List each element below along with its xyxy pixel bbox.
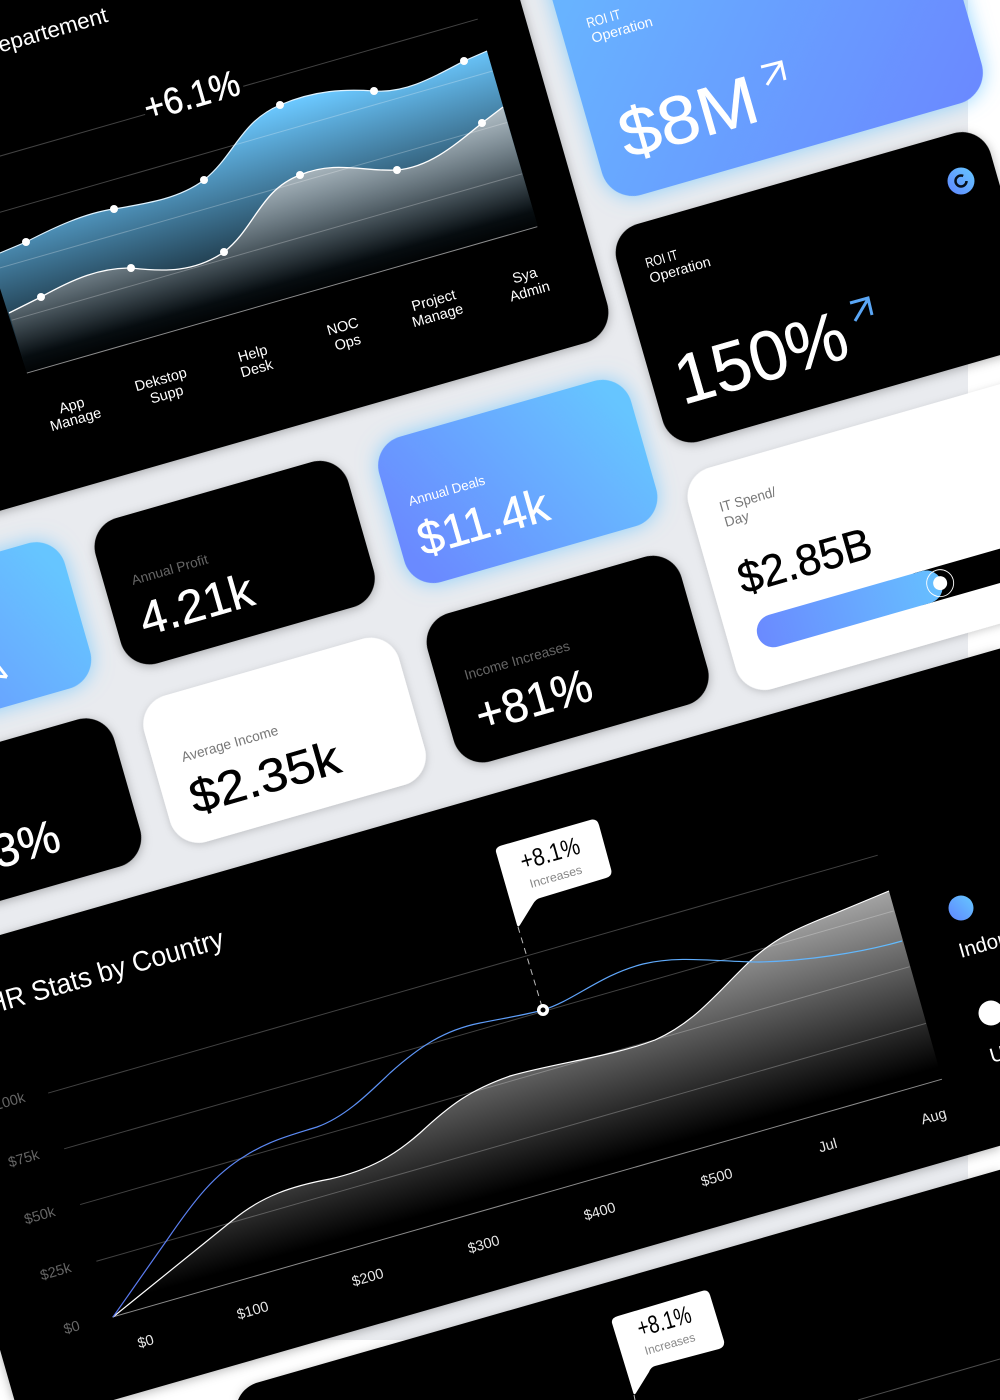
x axis labels: Desk <box>239 357 276 381</box>
x axis labels: Project <box>410 287 458 315</box>
card: left black stat <box>0 711 148 930</box>
x axis labels: Dekstop <box>133 365 189 395</box>
data points <box>22 57 486 301</box>
x axis labels: $300 <box>466 1233 502 1257</box>
callout: +8.1% increases: Increases <box>643 1330 697 1358</box>
card: Income Increases <box>420 549 716 769</box>
chart: blue area series <box>0 51 538 373</box>
icon: white arrow <box>761 62 785 85</box>
x axis labels: Admin <box>508 279 552 306</box>
card: ROI IT Operation 150%: Operation <box>647 253 712 286</box>
card: ROI IT Operation $8M <box>483 0 990 204</box>
x axis labels: $400 <box>582 1200 618 1224</box>
x axis labels: Help <box>236 342 269 366</box>
card: ROI IT Operation 150%: ROI IT <box>643 246 680 271</box>
card: Annual Deals <box>371 373 664 590</box>
y axis labels <box>0 1090 82 1338</box>
marker <box>537 1004 549 1016</box>
x axis labels: Manage <box>49 405 103 435</box>
card: Average Income: Average Income <box>179 722 280 765</box>
card: ROI IT Operation $8M: Operation <box>589 13 654 46</box>
x axis labels: Aug <box>919 1106 949 1128</box>
x axis labels: Supp <box>148 383 185 408</box>
chart: blue line series <box>113 941 902 1317</box>
dashed leader line <box>518 927 543 1010</box>
card: ROI IT Operation $8M: ROI IT <box>584 6 623 31</box>
card: Income Increases: Income Increases <box>462 637 572 683</box>
x axis labels <box>49 265 552 435</box>
card: left blue stat <box>0 535 98 752</box>
x axis labels <box>136 1106 949 1352</box>
y axis labels: $25k <box>39 1260 74 1284</box>
card: Annual Deals: $11.4k <box>411 478 555 566</box>
x axis labels: $200 <box>350 1266 386 1290</box>
x axis labels: NOC <box>325 315 361 339</box>
x axis labels: $500 <box>699 1166 735 1190</box>
y axis labels: $50k <box>23 1204 58 1228</box>
x axis labels: $100 <box>235 1299 271 1323</box>
callout: +6.1%: +6.1% <box>139 62 244 129</box>
card: Average Income <box>136 631 433 850</box>
card: IT Spend per Day: $2.85B <box>732 519 877 604</box>
callout: +8.1% increases <box>496 820 611 926</box>
callout: +8.1% increases <box>612 1290 724 1394</box>
y axis labels: $0 <box>62 1318 82 1338</box>
callout: +8.1% increases: +8.1% <box>517 832 583 876</box>
x axis labels: Jul <box>817 1136 839 1156</box>
callout: +8.1% increases: Increases <box>528 863 584 891</box>
callout: +8.1% increases: +8.1% <box>634 1301 695 1343</box>
x axis labels: Sya <box>511 265 540 287</box>
card: Annual Deals: Annual Deals <box>407 473 487 509</box>
panel: departement area chart <box>0 0 616 555</box>
icon: refresh badge <box>948 168 974 194</box>
card: Annual Profit: Annual Profit <box>130 552 210 588</box>
card: Annual Profit <box>87 454 382 671</box>
card: ROI IT Operation $8M: $8M <box>610 61 767 173</box>
chart: white area series <box>113 891 942 1317</box>
chart: white area series <box>9 107 538 373</box>
card: Income Increases: +81% <box>469 658 598 742</box>
panel: HR Stats by Country <box>0 648 1000 1400</box>
card: IT Spend per Day <box>681 283 1000 697</box>
y axis labels: $75k <box>7 1147 42 1171</box>
card: ROI IT Operation 150% <box>609 125 1000 449</box>
card: ROI IT Operation 150%: 150% <box>666 296 856 419</box>
legend <box>948 896 1000 1068</box>
icon: blue arrow <box>850 298 872 321</box>
card: IT Spend per Day: Day <box>722 508 751 530</box>
card: Annual Profit: 4.21k <box>133 563 260 646</box>
x axis labels: $0 <box>136 1332 156 1352</box>
x axis labels: Manage <box>411 301 465 331</box>
x axis labels: App <box>57 395 87 417</box>
icon: clipped arrow <box>0 663 7 677</box>
x axis labels: Ops <box>333 332 363 355</box>
progress bar <box>753 408 1000 651</box>
card: Average Income: $2.35k <box>183 730 346 824</box>
card: IT Spend per Day: IT Spend/ <box>717 483 778 515</box>
panel: lower chart <box>238 1170 1000 1400</box>
